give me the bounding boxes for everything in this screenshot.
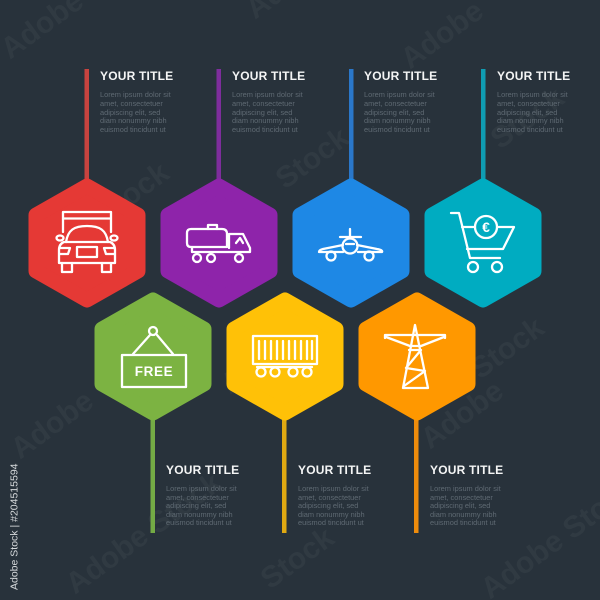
block: step 5 text (166, 463, 239, 527)
text: Stock (270, 121, 355, 196)
block: step 3 text (364, 69, 437, 134)
block: step 7 text: YOUR TITLE (430, 463, 503, 477)
block: step 2 text: amet, consectetuer (232, 99, 295, 108)
block: step 6 text (298, 463, 371, 527)
block: step 5 text: euismod tincidunt ut (166, 518, 232, 527)
block: step 2 text (232, 69, 305, 134)
block: step 4 text (497, 69, 570, 134)
block: step 5 text: YOUR TITLE (166, 463, 239, 477)
hexagon: red (36, 186, 138, 300)
hexagon: teal (432, 186, 534, 300)
block: step 6 text: YOUR TITLE (298, 463, 371, 477)
block: step 2 text: euismod tincidunt ut (232, 125, 298, 134)
block: step 5 text: Lorem ipsum dolor sit (166, 484, 237, 493)
block: step 2 text: adipiscing elit, sed (232, 108, 292, 117)
block: step 7 text: diam nonummy nibh (430, 510, 497, 519)
block: step 6 text: amet, consectetuer (298, 493, 361, 502)
block: step 6 text: euismod tincidunt ut (298, 518, 364, 527)
text: Adobe (215, 319, 310, 401)
block: step 5 text: amet, consectetuer (166, 493, 229, 502)
block: step 7 text: adipiscing elit, sed (430, 501, 490, 510)
block: step 6 text: Lorem ipsum dolor sit (298, 484, 369, 493)
block: step 4 text: YOUR TITLE (497, 69, 570, 83)
block: step 6 text: adipiscing elit, sed (298, 501, 358, 510)
block: step 1 text: euismod tincidunt ut (100, 125, 166, 134)
icon: shopping cart with euro: € (482, 219, 490, 235)
step 5 connector line (150, 418, 155, 533)
text: Stock (255, 521, 340, 596)
block: step 2 text: YOUR TITLE (232, 69, 305, 83)
text: Adobe Stock (60, 466, 228, 600)
block: step 3 text: adipiscing elit, sed (364, 108, 424, 117)
text: Stock (465, 311, 550, 386)
block: step 7 text: Lorem ipsum dolor sit (430, 484, 501, 493)
block: step 4 text: diam nonummy nibh (497, 116, 564, 125)
block: step 2 text: Lorem ipsum dolor sit (232, 90, 303, 99)
block: step 3 text: diam nonummy nibh (364, 116, 431, 125)
hexagon: yellow (234, 300, 336, 413)
hexagon: purple (168, 186, 270, 300)
block: step 4 text: Lorem ipsum dolor sit (497, 90, 568, 99)
block: step 3 text: amet, consectetuer (364, 99, 427, 108)
hexagon: orange (366, 300, 468, 413)
step 7 connector line (414, 418, 418, 533)
step 6 connector line (282, 418, 286, 533)
block: step 2 text: diam nonummy nibh (232, 116, 299, 125)
text: Adobe (5, 384, 100, 466)
icon: power pylon (385, 325, 445, 388)
block: step 1 text: adipiscing elit, sed (100, 108, 160, 117)
block: step 1 text: YOUR TITLE (100, 69, 173, 83)
step 2 connector line (216, 69, 221, 181)
block: step 7 text: amet, consectetuer (430, 493, 493, 502)
icon: airplane (319, 229, 382, 260)
text: Stock (90, 156, 175, 231)
text: Stock (485, 81, 570, 156)
block: step 1 text (100, 69, 173, 134)
hexagon: blue (300, 186, 402, 300)
step 3 connector line (349, 69, 354, 181)
block: step 1 text: amet, consectetuer (100, 99, 163, 108)
block: step 6 text: diam nonummy nibh (298, 510, 365, 519)
block: step 3 text: euismod tincidunt ut (364, 125, 430, 134)
icon: tanker truck (187, 225, 250, 262)
block: step 4 text: adipiscing elit, sed (497, 108, 557, 117)
icon: freight wagon (253, 336, 317, 376)
icon: truck front (56, 212, 118, 272)
block: step 7 text: euismod tincidunt ut (430, 518, 496, 527)
block: step 4 text: amet, consectetuer (497, 99, 560, 108)
block: step 7 text (430, 463, 503, 527)
block: step 1 text: diam nonummy nibh (100, 116, 167, 125)
block: step 5 text: diam nonummy nibh (166, 510, 233, 519)
block: step 4 text: euismod tincidunt ut (497, 125, 563, 134)
text: Adobe (415, 374, 510, 456)
step 4 connector line (481, 69, 486, 181)
block: step 3 text: YOUR TITLE (364, 69, 437, 83)
stock id label: Adobe Stock | #204515594 (8, 463, 20, 590)
block: step 3 text: Lorem ipsum dolor sit (364, 90, 435, 99)
hexagon: green (102, 300, 204, 413)
block: step 1 text: Lorem ipsum dolor sit (100, 90, 171, 99)
step 1 connector line (84, 69, 89, 181)
icon: free sign (122, 327, 186, 387)
icon: shopping cart with euro (451, 213, 514, 272)
block: step 5 text: adipiscing elit, sed (166, 501, 226, 510)
icon: free sign: FREE (135, 364, 173, 379)
